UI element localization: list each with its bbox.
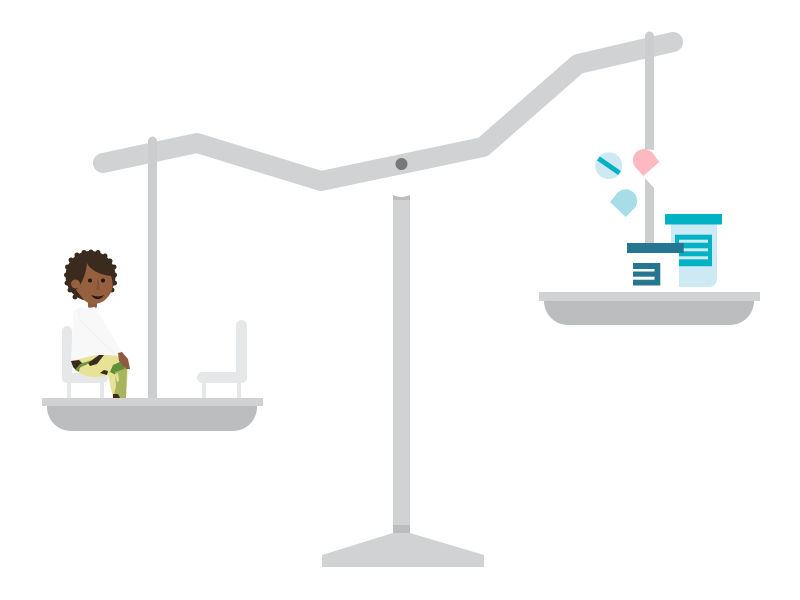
right rod xyxy=(645,32,654,245)
nose xyxy=(96,277,100,290)
pill: round tablet xyxy=(595,152,622,179)
empty chair xyxy=(197,320,247,398)
pill: light teal xyxy=(610,189,637,217)
pill: pink xyxy=(633,149,659,176)
mouth xyxy=(92,295,104,299)
eyes xyxy=(88,278,105,282)
hand xyxy=(118,352,130,369)
left rod xyxy=(148,136,157,398)
legs xyxy=(71,355,128,398)
box xyxy=(627,243,684,287)
scale beam xyxy=(103,42,673,181)
right pan xyxy=(539,292,760,325)
person seated xyxy=(64,250,130,398)
left pan xyxy=(42,398,263,431)
jar xyxy=(665,214,722,287)
face xyxy=(76,263,113,304)
pivot xyxy=(396,158,408,170)
central post xyxy=(393,195,410,533)
halo behind pink pill xyxy=(636,149,664,188)
base xyxy=(322,533,484,567)
ear xyxy=(71,280,80,288)
hair xyxy=(64,250,117,301)
shirt xyxy=(71,307,122,361)
neck xyxy=(88,298,97,309)
occupied chair xyxy=(62,326,108,398)
arm line xyxy=(78,309,117,356)
